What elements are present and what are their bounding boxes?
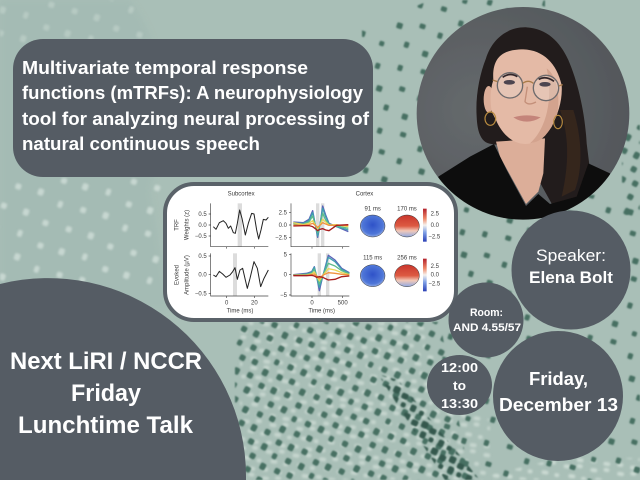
colour bars: 2.5 [431,264,440,270]
event name text: Next LiRI / NCCR [10,348,202,375]
lips [513,115,541,122]
chart: subcortex TRF: −0.5 [195,234,207,240]
chart: cortex TRF [275,203,349,249]
badge: speaker [512,210,630,330]
nose [525,87,536,104]
colour bars: −2.5 [428,235,441,241]
event name text [10,348,202,439]
chart: cortex evoked: Time (ms) [308,309,335,315]
row label: TRF weights: TRF [175,219,181,231]
neck [496,138,545,204]
chart: cortex TRF: 0.0 [279,223,288,229]
title text: tool for analyzing neural processing of [22,109,370,129]
topographic maps: 115 ms [363,256,382,262]
panel: talk title [13,39,373,177]
face [491,49,562,144]
badge: room: AND 4.55/57 [453,322,521,334]
eyes [504,80,515,85]
chart: cortex TRF: 2.5 [279,210,288,216]
badge: speaker: Speaker: [536,246,606,265]
chart: subcortex TRF: 0.0 [198,223,207,229]
chart: cortex evoked: 0 [284,273,288,279]
colour bars [423,209,441,291]
speaker photo [416,7,630,220]
chart: subcortex TRF [195,203,268,249]
badge: room [448,282,524,358]
chart: subcortex evoked [195,253,268,315]
badge: time: 12:00 [441,360,478,375]
black top [430,144,617,220]
colour bars: 0.0 [431,223,440,229]
row label: evoked amplitude [175,255,191,295]
hair [476,27,590,207]
colour bars: 0.0 [431,273,440,279]
row label: evoked amplitude: Evoked [175,265,181,285]
chart: subcortex evoked: 0.5 [198,254,207,260]
chart: cortex evoked: 500 [338,301,348,307]
row label: TRF weights: Weights (z) [185,210,191,240]
topographic maps: 91 ms [365,206,381,212]
event name text: Lunchtime Talk [18,412,193,439]
panel: event name [0,278,246,480]
colour bars: −2.5 [428,281,441,287]
topographic maps [360,206,419,287]
chart: subcortex evoked: −0.5 [195,291,207,297]
earrings [485,112,496,125]
chart: cortex evoked: 0 [310,301,314,307]
title text: Multivariate temporal response [22,58,308,78]
chart: subcortex TRF: 0.5 [198,212,207,218]
chart: subcortex evoked: 0 [225,301,229,307]
badge: time [427,355,492,415]
column heading: subcortex: Subcortex [228,192,255,198]
glasses [493,73,563,101]
title text: functions (mTRFs): A neurophysiology [22,83,363,103]
event name text: Friday [71,380,141,407]
badge: date [493,331,623,461]
chart: cortex evoked: −5 [280,293,288,299]
title text [22,58,370,154]
title text: natural continuous speech [22,134,260,154]
badge: date: December 13 [499,394,618,415]
chart: subcortex evoked: Time (ms) [227,309,253,315]
column heading: cortex: Cortex [356,192,373,198]
chart: cortex evoked [280,253,349,315]
chart: subcortex evoked: 20 [251,301,258,307]
badge: speaker: Elena Bolt [529,268,613,287]
chart: subcortex evoked: 0.0 [198,273,207,279]
topographic maps: 170 ms [397,206,417,212]
row label: TRF weights [175,210,191,240]
topographic maps: 256 ms [397,256,417,262]
panel: neural response figure [165,184,456,320]
row label: evoked amplitude: Amplitude (µV) [185,255,191,295]
ear [484,86,492,112]
badge: date: Friday, [529,368,588,389]
badge: time: 13:30 [441,396,478,411]
badge: room: Room: [470,307,503,319]
chart: cortex evoked: 5 [284,253,288,259]
badge: time: to [453,378,466,393]
chart: cortex TRF: −2.5 [275,236,288,242]
colour bars: 2.5 [431,211,440,217]
